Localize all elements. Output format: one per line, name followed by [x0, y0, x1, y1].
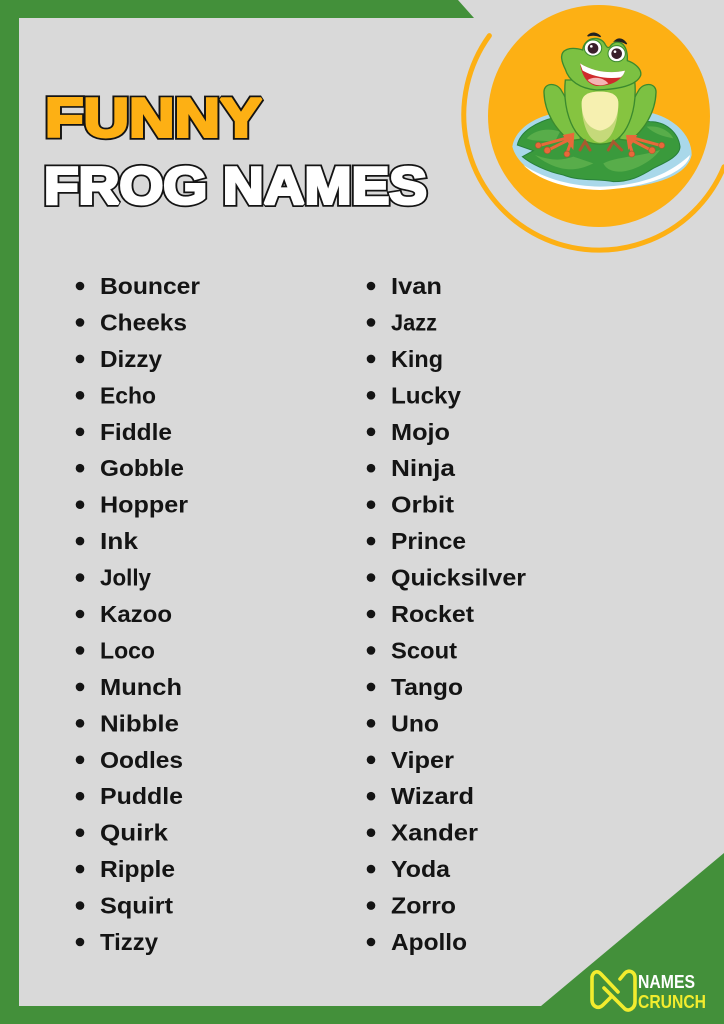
names list: column one: Squirt [100, 893, 173, 919]
names list: column two: Rocket [391, 601, 474, 627]
names list: column one: Jolly [100, 565, 151, 591]
logo: Names Crunch: NAMES [638, 971, 695, 992]
title [44, 86, 427, 216]
water [512, 112, 692, 189]
title: FROG NAMES [44, 158, 427, 216]
icon: frog on lily pad [512, 33, 692, 190]
names list: column two: Viper [391, 747, 454, 773]
names list: column one: Echo [100, 382, 156, 408]
names list: column two: Mojo [391, 419, 450, 445]
names list: column two: Quicksilver [391, 565, 526, 591]
names list: column two: King [391, 346, 443, 372]
names list: column two: Prince [391, 528, 466, 554]
names list: column one: Ripple [100, 856, 175, 882]
body [565, 80, 635, 144]
names list: column two: Ninja [391, 455, 456, 481]
names list: column one: Cheeks [100, 309, 187, 335]
names list: column one: Fiddle [100, 419, 172, 445]
names list: column two [367, 273, 526, 955]
names list: column two: Xander [391, 820, 478, 846]
names list: column one: Quirk [100, 820, 169, 846]
names list: column one [76, 273, 200, 955]
names list: column two: Orbit [391, 492, 454, 518]
head [562, 38, 641, 90]
names list: column two: Lucky [391, 382, 461, 408]
names list: column one: Loco [100, 637, 155, 663]
front feet [540, 137, 660, 154]
title: FUNNY [45, 86, 262, 148]
title: FUNNY [45, 86, 262, 148]
decorative orange arc [464, 36, 724, 250]
eyes [584, 40, 602, 56]
names list: column one: Kazoo [100, 601, 172, 627]
names list: column two: Apollo [391, 929, 467, 955]
names list: column two: Zorro [391, 893, 456, 919]
hind legs [544, 84, 581, 141]
mouth [580, 63, 625, 86]
lily pad [517, 117, 680, 182]
names list: column two: Uno [391, 710, 439, 736]
names list: column one: Bouncer [100, 273, 200, 299]
names list: column one: Ink [100, 528, 139, 554]
names list: column one: Munch [100, 674, 182, 700]
names list: column one: Nibble [100, 710, 179, 736]
names list: column one: Dizzy [100, 346, 162, 372]
orange circle [488, 5, 710, 227]
belly [582, 92, 618, 143]
logo: Names Crunch [592, 971, 706, 1012]
icon: logo mark [592, 971, 635, 1010]
title: FROG NAMES [44, 158, 427, 216]
names list: column two: Scout [391, 637, 457, 663]
names list: column one: Puddle [100, 783, 183, 809]
logo: Names Crunch: CRUNCH [638, 991, 706, 1012]
names list: column one: Oodles [100, 747, 183, 773]
names list: column two: Yoda [391, 856, 451, 882]
names list: column one: Hopper [100, 492, 188, 518]
brows [588, 33, 627, 44]
names list: column two: Wizard [391, 783, 474, 809]
names list: column one: Tizzy [100, 929, 158, 955]
names list: column one: Gobble [100, 455, 184, 481]
names list: column two: Jazz [391, 309, 437, 335]
names list: column two: Ivan [391, 273, 442, 299]
names list: column two: Tango [391, 674, 463, 700]
